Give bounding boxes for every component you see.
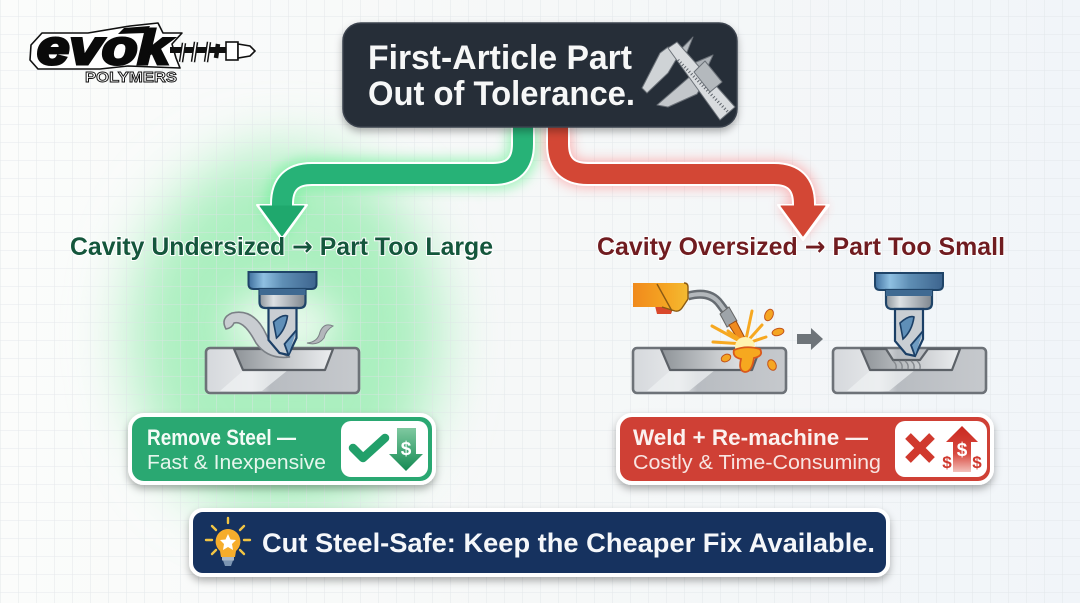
illustration: milling removes steel [206,272,359,393]
weld text: Costly & Time-Consuming [633,452,881,474]
illustration: weld buildup [633,283,786,393]
icon: check and falling cost: $ [401,439,412,460]
icon: X and rising cost: $ [957,440,968,461]
heading: oversized: Cavity Oversized → Part Too Small [597,232,1005,261]
icon: check and falling cost [341,421,428,477]
arrow: green branch to undersized [257,120,523,240]
arrow: red branch to oversized [558,120,829,240]
icon: light bulb with star [206,518,250,566]
welding torch [633,283,745,341]
illustration: re-machining weld [833,273,986,393]
remove steel text: Remove Steel — [147,425,296,450]
weld text: Weld + Re-machine — [633,425,868,450]
heading: undersized: Cavity Undersized → Part Too Large [70,232,493,261]
logo: evok polymers [30,22,255,86]
panel: takeaway banner [191,510,888,575]
remove steel text: Fast & Inexpensive [147,452,326,474]
icon: X and rising cost: $ [942,453,952,472]
title panel [343,23,737,127]
title text: First-Article Part [368,39,632,77]
takeaway text: Cut Steel-Safe: Keep the Cheaper Fix Available. [262,528,875,558]
panel: weld and re-machine [618,415,992,483]
logo: evok polymers: evok [37,22,173,75]
green glow behind left path [130,150,440,520]
arrow: weld then machine [797,328,823,350]
logo: evok polymers: POLYMERS [85,69,177,86]
icon: X and rising cost [895,421,987,477]
screw [170,42,255,62]
icon: X and rising cost: $ [972,453,982,472]
panel: remove steel [130,415,434,483]
sparks and molten weld [712,308,785,372]
title text: Out of Tolerance. [368,75,635,113]
icon: calipers [642,37,735,120]
metal chips [224,312,290,357]
